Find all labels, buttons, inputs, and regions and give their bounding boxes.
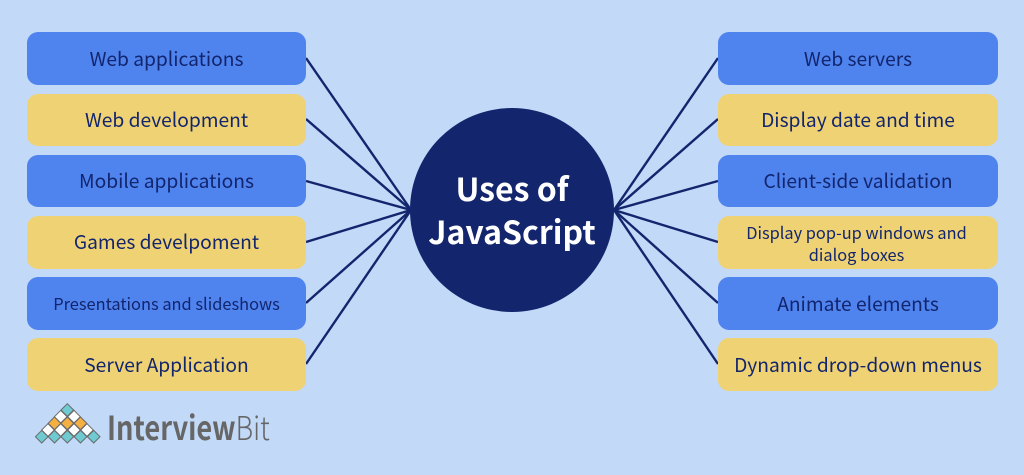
left item: Web development [27, 94, 306, 146]
left item: Presentations and slideshows: Presentations and slideshows [53, 290, 280, 314]
right item: Animate elements [718, 277, 998, 330]
icon: diamond pyramid [34, 403, 101, 444]
central circle: Uses of JavaScript: Uses of [456, 164, 568, 210]
left item: Mobile applications [27, 155, 306, 207]
right item: Dynamic drop-down menus [718, 338, 998, 391]
right item: Web servers [718, 32, 998, 85]
central circle: Uses of JavaScript [410, 108, 614, 312]
right item: Display pop-up windows and dialog boxes: dialog boxes [809, 242, 904, 266]
left item: Presentations and slideshows [27, 277, 306, 330]
right item: Display pop-up windows and dialog boxes [718, 216, 998, 269]
left item: Games develpoment [27, 216, 306, 269]
right item: Animate elements: Animate elements [777, 288, 939, 316]
right item: Display date and time [718, 94, 998, 146]
left item: Games develpoment: Games develpoment [74, 227, 259, 255]
right item: Display date and time: Display date and time [761, 105, 955, 133]
left item: Server Application: Server Application [84, 350, 249, 378]
right item: Client-side validation [718, 155, 998, 207]
logo wordmark: InterviewBit [107, 402, 270, 450]
right item: Display pop-up windows and dialog boxes: Display pop-up windows and [746, 220, 967, 244]
left item: Web applications: Web applications [90, 44, 243, 72]
right item: Dynamic drop-down menus: Dynamic drop-down menus [734, 350, 982, 378]
left item: Mobile applications: Mobile applications [79, 166, 254, 194]
logo: InterviewBit [34, 402, 270, 450]
left item: Server Application [27, 338, 306, 391]
left item: Web development: Web development [85, 105, 248, 133]
right item: Client-side validation: Client-side validation [763, 166, 953, 194]
left item: Web applications [27, 32, 306, 85]
right item: Web servers: Web servers [804, 44, 912, 72]
central circle: Uses of JavaScript: JavaScript [428, 208, 596, 254]
